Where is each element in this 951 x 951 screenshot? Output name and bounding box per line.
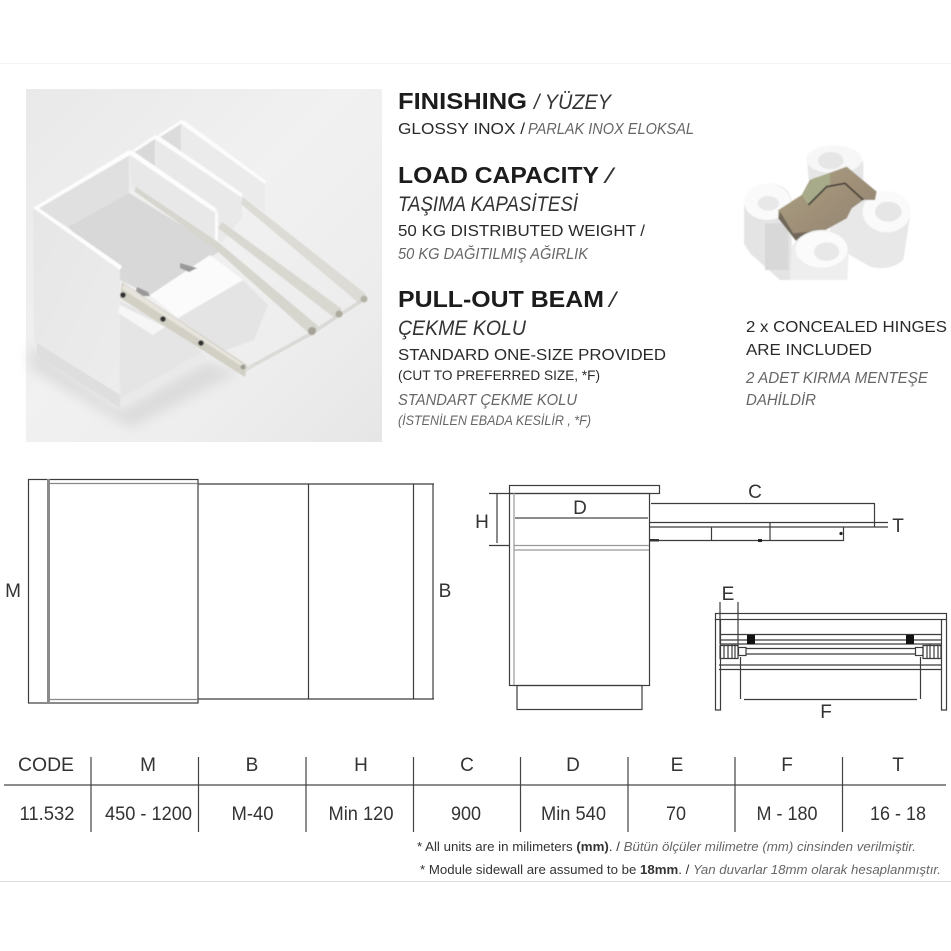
product photo: cabinet with pull-out rails <box>26 89 382 442</box>
diagram: side view with dimensions H, D, C, T: T <box>892 516 904 537</box>
heading: pull-out beam: (İSTENİLEN EBADA KESİLİR , *F) <box>398 412 591 428</box>
table header row <box>18 755 904 776</box>
table value row: 900 <box>451 804 481 825</box>
heading: load capacity: LOAD CAPACITY <box>398 162 599 188</box>
caption: hinges <box>745 319 947 409</box>
footnotes: * Module sidewall are assumed to be 18mm. / Yan duvarlar 18mm olarak hesaplanmıştır. <box>420 863 941 877</box>
diagram: side view with dimensions H, D, C, T: H <box>475 512 489 533</box>
table value row: M - 180 <box>756 804 818 825</box>
heading: load capacity: 50 KG DAĞITILMIŞ AĞIRLIK <box>398 244 589 263</box>
diagram: rear view with dimensions E and F <box>716 584 946 723</box>
table value row: 16 - 18 <box>870 804 926 825</box>
heading: load capacity <box>398 162 646 263</box>
heading: pull-out beam: (CUT TO PREFERRED SIZE, *F) <box>398 367 600 383</box>
table header row: CODE <box>18 755 74 776</box>
table value row: M-40 <box>232 804 274 825</box>
diagram: side view with dimensions H, D, C, T <box>475 482 904 710</box>
heading: pull-out beam: STANDARD ONE-SIZE PROVIDED <box>398 347 666 364</box>
table value row <box>20 804 926 825</box>
table value row: Min 120 <box>328 804 394 825</box>
heading: load capacity: 50 KG DISTRIBUTED WEIGHT / <box>398 223 646 240</box>
heading: finishing: / YÜZEY <box>532 91 613 114</box>
heading: pull-out beam <box>398 286 666 428</box>
table header row: C <box>460 755 474 776</box>
table header row: E <box>671 755 683 776</box>
caption: hinges: 2 ADET KIRMA MENTEŞE <box>745 370 928 387</box>
heading: finishing: PARLAK INOX ELOKSAL <box>528 121 694 138</box>
heading: finishing: FINISHING <box>398 88 527 114</box>
diagram: front view with dimensions M and B <box>5 479 451 703</box>
icon: concealed hinge photo <box>744 145 911 280</box>
diagram: rear view with dimensions E and F: F <box>820 702 832 723</box>
footnotes <box>417 840 941 877</box>
heading: finishing: GLOSSY INOX / <box>398 121 526 138</box>
table header row: T <box>892 755 904 776</box>
caption: hinges: DAHİLDİR <box>746 390 816 409</box>
diagram: front view with dimensions M and B: B <box>439 581 451 602</box>
table value row: 11.532 <box>20 804 74 825</box>
caption: hinges: 2 x CONCEALED HINGES <box>746 319 947 336</box>
footnotes: * All units are in milimeters (mm). / Bütün ölçüler milimetre (mm) cinsinden verilmiştir. <box>417 840 916 854</box>
diagram: front view with dimensions M and B: M <box>5 581 21 602</box>
rails <box>134 187 318 336</box>
table header row: D <box>566 755 580 776</box>
heading: pull-out beam: ÇEKME KOLU <box>398 317 527 340</box>
heading: pull-out beam: PULL-OUT BEAM <box>398 286 604 312</box>
caption: hinges: ARE INCLUDED <box>746 342 872 359</box>
diagram: side view with dimensions H, D, C, T: D <box>573 498 587 519</box>
heading: load capacity: TAŞIMA KAPASİTESİ <box>398 193 579 216</box>
table value row: Min 540 <box>541 804 606 825</box>
table header row: H <box>354 755 368 776</box>
table header row: M <box>140 755 156 776</box>
heading: pull-out beam: / <box>607 289 619 312</box>
table: dimensions <box>4 755 946 832</box>
diagram: side view with dimensions H, D, C, T: C <box>748 482 762 503</box>
table value row: 450 - 1200 <box>105 804 192 825</box>
table header row: F <box>781 755 793 776</box>
table header row: B <box>246 755 258 776</box>
diagram: rear view with dimensions E and F: E <box>722 584 734 605</box>
heading: finishing <box>398 88 694 138</box>
heading: pull-out beam: STANDART ÇEKME KOLU <box>398 392 577 409</box>
heading: load capacity: / <box>602 165 616 188</box>
table value row: 70 <box>666 804 686 825</box>
